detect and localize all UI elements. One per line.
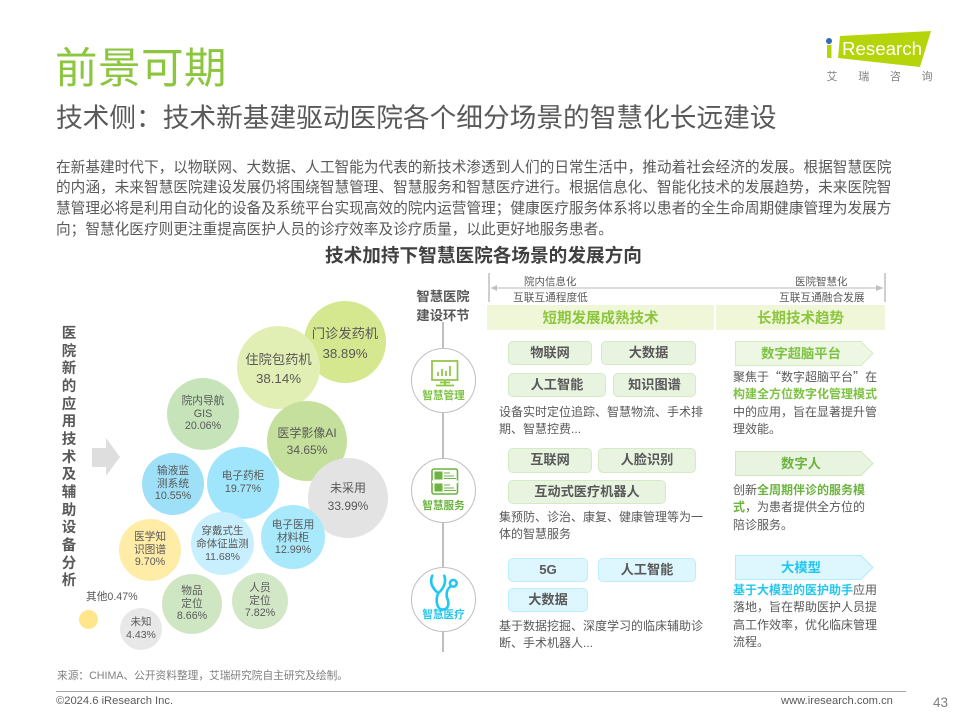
axis label: 互联互通程度低: 互联互通程度低 (513, 292, 588, 304)
logo: iResearch: Research (842, 38, 922, 59)
bubble: 医学知识图谱: 识图谱 (134, 544, 166, 556)
title: 前景可期 (55, 46, 227, 93)
logo: iResearch (826, 31, 953, 83)
bubble chart (79, 301, 388, 650)
node: 智慧服务 (411, 458, 476, 523)
tag: 数字超脑平台: 数字超脑平台 (761, 346, 841, 361)
bubble: 医学知识图谱 (119, 519, 181, 581)
chip (508, 558, 588, 582)
tag: 大模型 (735, 555, 874, 580)
bubble: 物品定位: 定位 (181, 598, 203, 610)
chip: 人工智能 (621, 562, 673, 577)
bubble: 未采用: 33.99% (328, 499, 368, 513)
icon: stethoscope (430, 574, 458, 611)
intro paragraph: 在新基建时代下，以物联网、大数据、人工智能为代表的新技术渗透到人们的日常生活中，推动着社会经济的发展。根据智慧医院 (56, 160, 891, 176)
text: 数字人: 陪诊服务。 (733, 518, 793, 532)
bubble: 医学影像AI (267, 401, 347, 481)
text: 数字人: 式，为患者提供全方位的 (733, 500, 865, 514)
bubble: 穿戴式生命体征监测: 11.68% (205, 551, 240, 563)
arrow: to bubbles (92, 438, 120, 476)
page number: 43 (933, 695, 948, 710)
bubble: 电子药柜 (207, 447, 279, 519)
text: 智慧医疗 short term: 基于数据挖掘、深度学习的临床辅助诊 (499, 619, 703, 633)
bubble: 院内导航GIS (167, 378, 239, 450)
footer copyright: ©2024.6 iResearch Inc. (56, 695, 173, 707)
bubble: 住院包药机 (237, 326, 320, 409)
bubble: 电子医用材料柜: 电子医用 (272, 519, 314, 531)
text: 智慧管理 short term: 设备实时定位追踪、智慧物流、手术排 (499, 405, 703, 419)
label: 智慧服务 (422, 500, 465, 512)
text: 智慧服务 short term (499, 510, 703, 541)
source note: 来源：CHIMA、公开资料整理，艾瑞研究院自主研究及绘制。 (57, 670, 348, 682)
row label: 智慧医院建设环节 (416, 289, 470, 323)
text: 大模型: 基于大模型的医护助手应用 (733, 583, 877, 597)
text: 智慧管理 short term: 期、智慧控费... (499, 422, 581, 436)
bubble: 电子药柜: 19.77% (225, 483, 261, 495)
chip: 物联网 (530, 345, 570, 360)
icon: monitor (431, 360, 458, 386)
footer website: www.iresearch.com.cn (781, 695, 893, 707)
bubble: 人员定位: 人员 (249, 582, 271, 594)
bubble: 医学影像AI: 医学影像AI (277, 426, 337, 440)
bubble: 输液监测系统 (142, 453, 204, 515)
chip: 人脸识别 (621, 452, 673, 467)
chip (508, 480, 666, 504)
chip (508, 341, 592, 365)
text: 数字人 (733, 483, 865, 532)
intro paragraph: 的内涵，未来智慧医院建设发展仍将围绕智慧管理、智慧服务和智慧医疗进行。根据信息化、智能化技术的发展趋势，未来医院智 (56, 180, 891, 196)
intro paragraph (56, 159, 891, 238)
text: 智慧管理 short term (499, 405, 703, 436)
text: 数字人: 创新全周期伴诊的服务模 (733, 483, 865, 497)
column header: 短期发展成熟技术: 短期发展成熟技术 (542, 311, 658, 327)
text: 数字超脑平台: 聚焦于“数字超脑平台”在 (733, 368, 877, 385)
node: 智慧管理 (411, 348, 476, 413)
text: 大模型: 流程。 (733, 635, 769, 649)
axis label: 院内信息化: 院内信息化 (524, 276, 576, 288)
node: 智慧医疗 (411, 567, 476, 632)
bubble: 人员定位: 7.82% (245, 607, 275, 619)
chart heading: 技术加持下智慧医院各场景的发展方向 (325, 245, 642, 266)
bubble: 物品定位: 8.66% (177, 610, 207, 622)
bubble: 输液监测系统: 测系统 (157, 478, 189, 490)
chips: 智慧医疗 (508, 558, 696, 612)
bubble: 住院包药机: 38.14% (256, 370, 301, 386)
label: 其他: 其他0.47% (86, 591, 138, 603)
bubble: 住院包药机: 住院包药机 (245, 352, 312, 366)
bubble: 输液监测系统: 输液监 (157, 465, 189, 477)
bubble: 院内导航GIS: 20.06% (185, 420, 221, 432)
bubble: 未采用: 未采用 (330, 481, 366, 495)
bubble: 电子药柜: 电子药柜 (222, 470, 264, 482)
column header: 长期技术趋势: 长期技术趋势 (757, 311, 844, 327)
bubble: 其他 (79, 610, 98, 629)
bubble: 穿戴式生命体征监测: 命体征监测 (196, 538, 249, 550)
chip: 互动式医疗机器人 (534, 484, 640, 499)
chip (508, 373, 606, 397)
label: 智慧管理 (422, 390, 465, 402)
vertical axis label: 医院新的应用技术及辅助设备分析 (62, 326, 76, 589)
chip (508, 588, 588, 612)
logo: iResearch: 艾瑞咨询 (826, 71, 953, 83)
chip (508, 448, 592, 473)
bubble: 未知: 未知 (130, 616, 152, 628)
tag: 数字超脑平台 (735, 341, 874, 366)
bubble: 输液监测系统: 10.55% (155, 490, 191, 502)
bubble: 穿戴式生命体征监测: 穿戴式生 (202, 525, 244, 537)
chip: 5G (539, 562, 557, 577)
tag: 数字人: 数字人 (781, 456, 821, 471)
intro paragraph: 向；智慧化医疗则更注重提高医护人员的诊疗效率及诊疗质量，以此更好地服务患者。 (56, 222, 613, 238)
bubble: 医学知识图谱: 医学知 (134, 531, 166, 543)
intro paragraph: 慧管理必将是利用自动化的设备及系统平台实现高效的院内运营管理；健康医疗服务体系将以患者的全生命周期健康管理为发展方 (56, 201, 891, 217)
text: 大模型 (733, 583, 877, 649)
chip: 互联网 (530, 452, 570, 467)
chip: 大数据 (629, 345, 668, 360)
bubble: 物品定位: 物品 (181, 585, 203, 597)
bubble: 电子医用材料柜: 12.99% (275, 544, 311, 556)
text: 智慧服务 short term: 体的智慧服务 (499, 527, 571, 541)
bubble: 未采用 (308, 458, 388, 538)
chip (598, 448, 696, 473)
chip (613, 373, 696, 397)
bubble: 门诊发药机: 38.89% (322, 346, 368, 361)
text: 智慧医疗 short term (499, 619, 703, 650)
text: 智慧医疗 short term: 断、手术机器人... (499, 636, 593, 650)
bubble: 人员定位 (232, 573, 288, 629)
footer rule (56, 691, 906, 692)
text: 大模型: 落地，旨在帮助医护人员提 (733, 600, 877, 614)
axis: informatization scale (488, 273, 886, 304)
bubble: 物品定位 (162, 574, 222, 634)
row label: 智慧医院建设环节: 智慧医院 (416, 289, 470, 304)
text: 数字超脑平台: 构建全方位数字化管理模式 (733, 387, 877, 401)
row label: 智慧医院建设环节: 建设环节 (416, 308, 470, 323)
tag: 大模型: 大模型 (781, 560, 821, 575)
chip: 大数据 (528, 592, 568, 607)
text: 数字超脑平台: 理效能。 (733, 422, 781, 436)
column header: 长期技术趋势 (716, 305, 885, 330)
bubble: 电子医用材料柜: 材料柜 (277, 532, 309, 544)
chips: 智慧服务 (508, 448, 696, 504)
axis label: 互联互通融合发展: 互联互通融合发展 (779, 292, 865, 304)
bubble: 医学知识图谱: 9.70% (135, 556, 165, 568)
bubble: 院内导航GIS: 院内导航 (182, 395, 224, 407)
column header: 短期发展成熟技术 (487, 305, 714, 330)
bubble: 门诊发药机: 门诊发药机 (312, 326, 378, 341)
text: 数字超脑平台: 中的应用，旨在显著提升管 (733, 405, 877, 419)
chips: 智慧管理 (508, 341, 696, 397)
axis label: 医院智慧化: 医院智慧化 (795, 276, 848, 288)
text: 数字超脑平台 (733, 368, 877, 436)
chip: 知识图谱 (628, 377, 681, 392)
bubble: 医学影像AI: 34.65% (287, 443, 327, 457)
chip: 人工智能 (531, 377, 583, 392)
bubble: 门诊发药机 (304, 301, 386, 383)
tag: 数字人 (735, 451, 874, 476)
chip (598, 558, 696, 582)
bubble: 院内导航GIS: GIS (194, 408, 212, 420)
chip (601, 341, 696, 365)
bubble: 未知: 4.43% (126, 629, 156, 641)
bubble: 穿戴式生命体征监测 (191, 512, 254, 575)
text: 智慧服务 short term: 集预防、诊治、康复、健康管理等为一 (499, 510, 703, 524)
bubble: 人员定位: 定位 (249, 595, 271, 607)
timeline spine (442, 322, 444, 652)
bubble: 未知 (120, 608, 162, 650)
subtitle: 技术侧：技术新基建驱动医院各个细分场景的智慧化长远建设 (56, 103, 777, 133)
bubble: 电子医用材料柜 (261, 505, 325, 569)
text: 大模型: 高工作效率，优化临床管理 (733, 618, 877, 632)
icon: records (431, 468, 458, 495)
label: 智慧医疗 (422, 608, 465, 620)
